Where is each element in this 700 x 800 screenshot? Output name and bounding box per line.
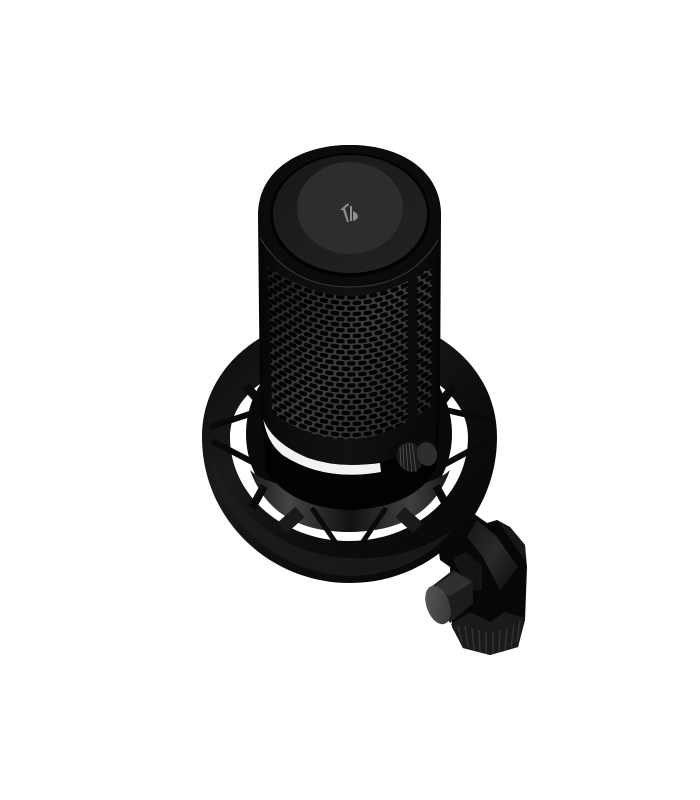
lower microphone dome <box>262 405 440 510</box>
speaker mesh grille <box>268 266 432 440</box>
shock mount ring <box>202 314 497 583</box>
clamp glossy arm surface <box>467 520 518 590</box>
clamp head rim <box>497 520 526 562</box>
mount adjustment knob <box>384 417 440 476</box>
clamp base: ribbed cylinder <box>451 612 525 655</box>
suspension elastic cords <box>210 386 490 546</box>
illuminated white band <box>262 402 381 475</box>
illustration: black USB microphone on shock mount <box>202 145 527 655</box>
logo mark <box>340 203 358 222</box>
top touch disc <box>297 162 403 254</box>
suspension inner cradle <box>246 336 452 532</box>
microphone body <box>258 145 441 465</box>
microphone top cap <box>258 145 441 288</box>
shock mount clamp: arm and swivel <box>420 513 527 655</box>
clamp tightening knob <box>420 570 473 628</box>
ring front highlight <box>208 452 452 576</box>
clamp washer <box>452 552 482 590</box>
